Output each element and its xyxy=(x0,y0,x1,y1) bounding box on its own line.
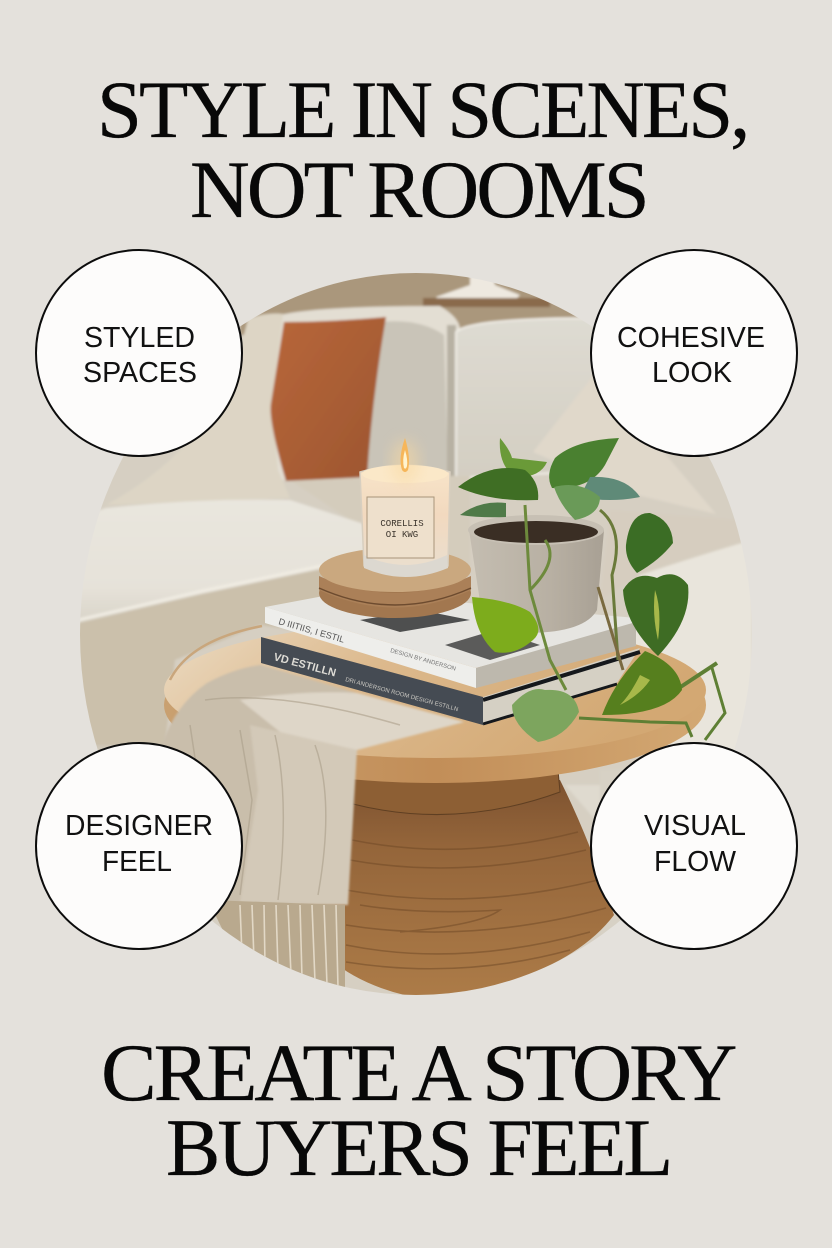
badge: visual flow: FLOW xyxy=(654,846,737,878)
badge: cohesive look: COHESIVE xyxy=(617,322,765,354)
book stack: D IIITIIS, I ESTIL xyxy=(277,616,346,645)
candle xyxy=(360,438,450,577)
title: NOT ROOMS xyxy=(190,144,647,235)
book stack: DRI ANDERSON ROOM DESIGN ESTILLN xyxy=(344,677,459,713)
photo: styled side table scene xyxy=(70,260,770,1010)
lower book pages xyxy=(483,648,640,725)
badge: designer feel: FEEL xyxy=(102,846,172,878)
lower book spine xyxy=(261,637,483,725)
sofa back xyxy=(270,306,460,480)
candle: CORELLIS xyxy=(380,519,424,529)
book stack: VD ESTILLN xyxy=(272,651,337,680)
table top xyxy=(164,697,706,783)
leaves xyxy=(500,438,547,477)
book stack: DESIGN BY ANDERSON xyxy=(389,648,456,673)
throw fringe xyxy=(208,900,345,990)
upper book spine xyxy=(265,607,476,688)
badge: styled spaces: SPACES xyxy=(83,357,197,389)
seat behind xyxy=(316,475,470,482)
title: STYLE IN SCENES, xyxy=(97,63,747,155)
closing headline: CREATE A STORY xyxy=(101,1027,736,1118)
badge: visual flow xyxy=(591,743,797,949)
right striped pillow xyxy=(536,406,711,511)
badge: styled spaces xyxy=(36,250,242,456)
badge: visual flow: VISUAL xyxy=(644,810,746,842)
closing headline xyxy=(101,1027,736,1193)
left cream pillow xyxy=(243,312,282,480)
potted plant xyxy=(458,438,725,742)
upper book cover xyxy=(265,592,636,668)
candle: OI KWG xyxy=(386,530,418,540)
closing headline: BUYERS FEEL xyxy=(166,1102,670,1193)
book stack xyxy=(261,592,640,725)
sofa backdrop xyxy=(70,260,770,1010)
orange pillow xyxy=(271,317,386,481)
badge: designer feel xyxy=(36,743,242,949)
side table xyxy=(164,622,706,1000)
table base xyxy=(296,780,614,1000)
upper book pages xyxy=(476,622,636,688)
badge: designer feel: DESIGNER xyxy=(65,810,213,842)
vines xyxy=(525,505,725,740)
sofa front xyxy=(80,569,324,746)
wooden coasters xyxy=(319,548,471,618)
left seat cushion xyxy=(80,499,362,616)
badge: styled spaces: STYLED xyxy=(84,322,195,354)
badge: cohesive look: LOOK xyxy=(652,357,733,389)
right seat and arm xyxy=(600,510,752,600)
title xyxy=(97,63,747,235)
draped throw xyxy=(162,665,464,990)
badge: cohesive look xyxy=(591,250,797,456)
table neck xyxy=(353,770,560,815)
